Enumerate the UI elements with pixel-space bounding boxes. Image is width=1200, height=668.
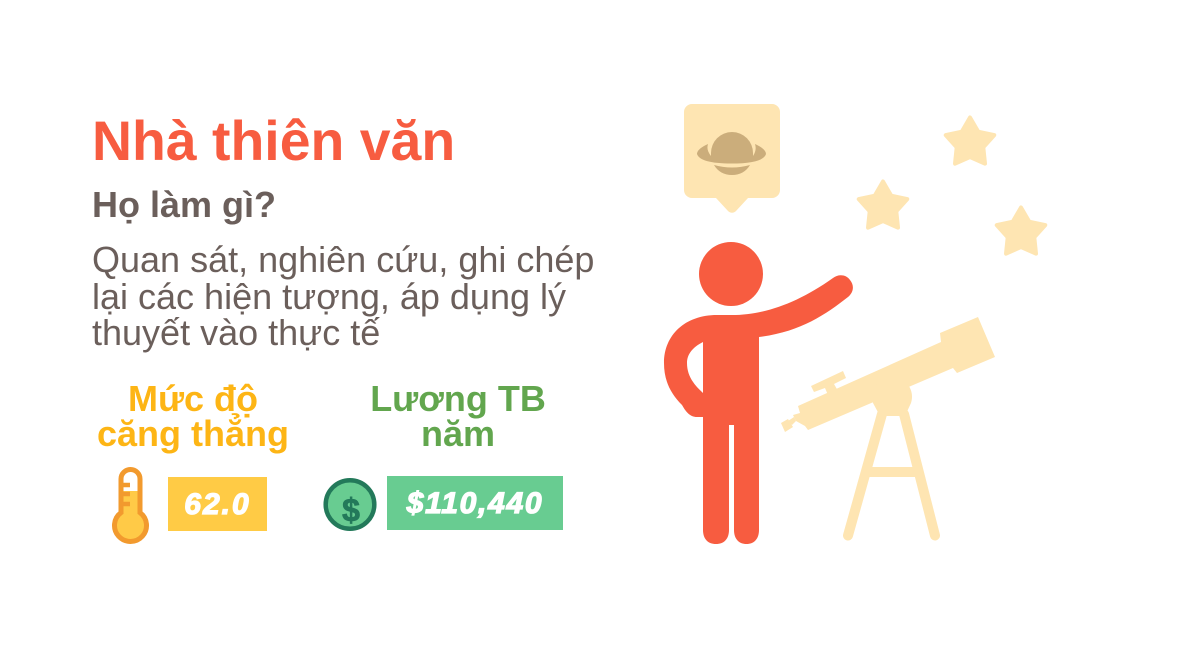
stress label: Mức độ [128,378,258,419]
stress value box [168,477,267,531]
icon: astronomer figure [664,242,853,544]
icon: telescope [781,317,995,536]
icon: star top [946,118,994,164]
subheading: Họ làm gì? [92,184,276,225]
title: Nhà thiên văn [92,110,455,172]
description text: Quan sát, nghiên cứu, ghi chép [92,239,594,280]
description text: lại các hiện tượng, áp dụng lý [92,276,566,316]
description text [92,239,594,353]
description text: thuyết vào thực tế [92,312,380,353]
icon: star right [997,208,1045,254]
icon: thermometer [114,470,146,541]
salary label: Lương TB [370,378,546,419]
stress label: căng thẳng [97,413,289,454]
stress value box: 62.0 [184,488,251,521]
salary label: năm [421,413,495,454]
icon: star left [859,182,907,228]
icon: speech bubble with planet [684,104,780,213]
icon: dollar coin [326,480,374,529]
salary value box: $110,440 [407,487,543,520]
stress label [97,378,289,454]
icon: dollar coin: $ [342,492,360,528]
salary label [370,378,546,454]
salary value box [387,476,563,530]
